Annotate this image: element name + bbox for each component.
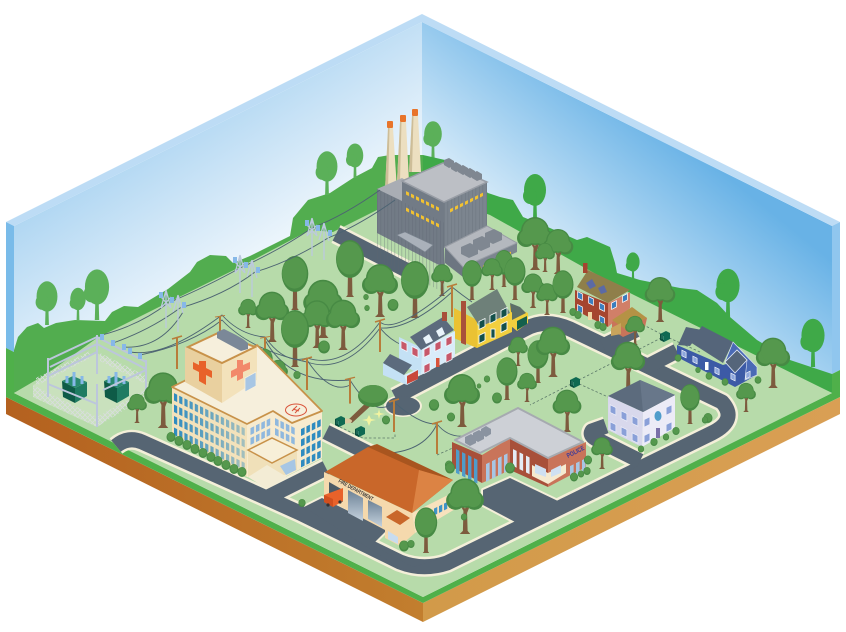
police sign: POLICE xyxy=(566,445,586,460)
power plant factory xyxy=(377,109,517,293)
porch xyxy=(386,510,410,544)
underground dashed lines xyxy=(340,318,700,455)
hospital main roof xyxy=(172,345,322,424)
red cross right xyxy=(231,360,250,381)
trees: hill and forest xyxy=(238,217,675,367)
police roof xyxy=(455,408,583,458)
grey house left wall xyxy=(608,396,643,447)
brick garage xyxy=(612,310,647,337)
fire truck xyxy=(324,488,343,507)
ground base: grass edge xyxy=(6,348,840,603)
trees near hospital xyxy=(127,349,301,428)
foreground trees xyxy=(415,478,484,553)
navy blue house xyxy=(675,326,761,387)
yellow house xyxy=(454,289,528,348)
brick right wall xyxy=(608,292,630,327)
ground base: soil left face xyxy=(6,397,423,622)
loading canopy xyxy=(397,232,433,252)
trees right side xyxy=(591,338,790,469)
fallen tree and sparks xyxy=(340,385,390,426)
blue house left wall xyxy=(399,337,422,375)
back wall: left sky xyxy=(14,22,422,393)
bay doors xyxy=(348,490,382,527)
police rooftop units xyxy=(465,426,491,446)
substation gantry xyxy=(48,335,146,427)
grey house right wall xyxy=(642,395,675,447)
hospital hedge xyxy=(166,432,246,477)
navy windows xyxy=(682,350,750,381)
dormers xyxy=(586,279,607,294)
hospital forecourt xyxy=(248,465,287,489)
factory left wall xyxy=(377,181,445,268)
brick windows xyxy=(578,292,627,324)
green utility boxes xyxy=(335,331,670,437)
factory roof xyxy=(402,163,487,202)
yellow windows xyxy=(479,308,507,344)
navy main roof xyxy=(690,326,733,363)
wall cut side left xyxy=(6,222,14,352)
police station xyxy=(445,408,592,487)
insulators xyxy=(100,334,142,359)
fire station shrubs xyxy=(298,499,415,552)
hospital tower left wall xyxy=(185,347,222,403)
chimney xyxy=(461,301,466,345)
hospital centre wall xyxy=(247,411,322,478)
hospital left windows xyxy=(174,393,245,470)
fire station side windows xyxy=(419,496,459,523)
hospital entrance canopy xyxy=(248,438,297,480)
police porch xyxy=(532,464,566,484)
red cross left xyxy=(193,361,212,385)
chimney xyxy=(583,263,588,273)
lawn floor xyxy=(14,190,832,597)
hospital wing windows xyxy=(250,418,321,468)
yellow walls xyxy=(454,308,512,348)
police left wall xyxy=(452,442,482,483)
hospital xyxy=(166,329,322,489)
grey house xyxy=(608,380,680,452)
substation fence xyxy=(33,351,153,427)
brick roof xyxy=(577,270,630,303)
navy gable roof xyxy=(725,350,747,373)
blue house right wall xyxy=(421,331,455,375)
substation xyxy=(33,334,153,427)
fire station roof xyxy=(325,447,453,513)
chimney xyxy=(442,312,447,321)
grey house windows xyxy=(610,405,672,443)
navy wing roof xyxy=(678,327,702,346)
substation ground xyxy=(33,353,153,427)
police centre wall xyxy=(482,438,510,483)
back wall: right sky xyxy=(422,22,832,393)
wall cut side right xyxy=(832,222,840,374)
grey house roof xyxy=(608,380,675,412)
helipad xyxy=(286,404,306,416)
navy gable side xyxy=(725,342,757,380)
blue house garage xyxy=(383,354,418,385)
middle neighbourhood trees xyxy=(429,327,645,432)
foundation shrubs xyxy=(569,308,607,331)
hospital tower roof xyxy=(188,333,255,363)
transformers xyxy=(62,372,129,403)
fire department xyxy=(298,444,462,552)
hospital main left wall xyxy=(172,387,247,477)
ground base: soil right face xyxy=(423,397,840,622)
blue house roof xyxy=(410,317,454,350)
tower window xyxy=(245,372,256,392)
police inner wall xyxy=(510,438,548,487)
road network xyxy=(116,234,728,574)
police shrubs xyxy=(445,456,592,482)
factory window rows xyxy=(406,191,483,228)
fire station side wall xyxy=(412,488,462,533)
blue house windows xyxy=(401,336,452,374)
smokestacks xyxy=(385,109,421,190)
low block roof xyxy=(377,178,444,212)
factory right wall xyxy=(444,182,487,248)
light blue house xyxy=(383,312,455,385)
fire station sign: FIRE DEPARTMENT xyxy=(337,479,374,503)
fire station front wall xyxy=(324,472,415,546)
police right wall xyxy=(548,442,586,487)
dormers xyxy=(423,327,445,344)
hospital tower right wall xyxy=(222,347,257,403)
yellow roof xyxy=(467,289,510,327)
navy walls xyxy=(677,345,757,387)
police windows xyxy=(456,449,586,484)
power lines and pylons xyxy=(102,190,472,454)
grey house shrubs xyxy=(638,427,680,452)
rooftop units xyxy=(217,329,248,351)
wall top rim xyxy=(6,14,840,226)
hillside left with silhouette trees xyxy=(14,121,442,393)
red brick house xyxy=(569,263,647,345)
roof vents xyxy=(444,158,482,181)
yellow garage xyxy=(510,305,528,331)
annex xyxy=(445,226,517,277)
hillside right with silhouette trees xyxy=(423,155,832,393)
navy shrubs and path xyxy=(675,354,761,386)
brick left wall xyxy=(575,290,608,327)
